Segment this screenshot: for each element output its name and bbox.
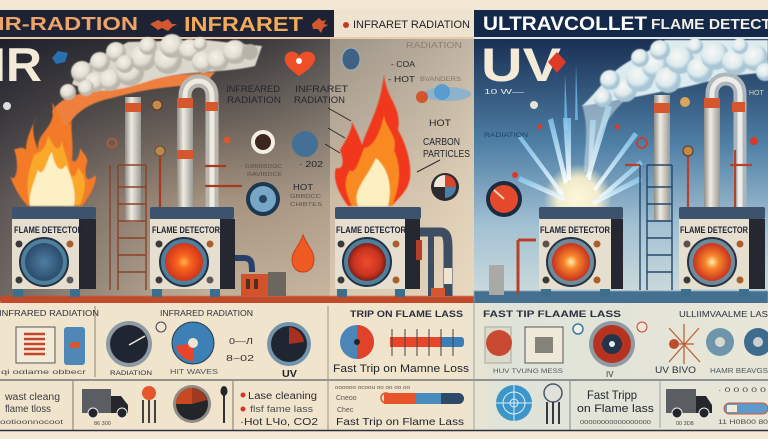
strip headings: INFRARED RADIATION	[0, 309, 99, 318]
header label: infrared radiation: INFRARET RADIATION	[353, 19, 470, 31]
strip headings: ULLIIMVAALME LAS	[679, 310, 768, 319]
bottom row: ultraviolet	[496, 384, 768, 427]
panel: lower information strip	[0, 303, 768, 431]
detector 2	[150, 207, 235, 297]
header label: infrared radiation	[334, 10, 474, 37]
bottom row: infrared: flsf fame lass	[250, 404, 314, 414]
bottom row: ultraviolet: Fast Tripp	[587, 388, 637, 402]
gauges and indicators: infrared row: qi oαlame obbecr	[1, 370, 86, 376]
detector 3	[335, 207, 421, 297]
indicators: ultraviolet row: HUV TVUNG MESS	[493, 368, 564, 375]
gauges and indicators: infrared row: HIT WAVES	[170, 369, 218, 376]
callouts: ultraviolet annotations: RADIATION	[484, 132, 528, 139]
bottom row: ultraviolet: 00 3D8	[676, 421, 694, 427]
callouts: infrared labels: CHIBTES	[290, 202, 322, 208]
panel: infrared scene	[0, 39, 474, 304]
callouts: infrared labels: RADIATION	[227, 95, 281, 105]
strip headings: FAST TIP FLAAME LASS	[483, 309, 621, 319]
header bar: ultraviolet: ULTRAVCOLLET	[483, 14, 647, 35]
indicators: ultraviolet row: IV	[606, 370, 614, 379]
detector 5	[679, 207, 765, 297]
gauges and indicators: infrared row	[1, 321, 311, 380]
gauges and indicators: infrared row: UV	[282, 369, 297, 380]
bottom row: infrared: wast cleang	[4, 392, 60, 403]
pipework and junction box	[235, 258, 286, 296]
bottom row: trip readout: oooooo ocoou oo oo oo oo	[335, 385, 410, 391]
callouts: infrared labels: - COA	[391, 60, 416, 69]
detector 3: FLAME DETECTOR	[336, 225, 406, 236]
bottom row: ultraviolet: on Flame lass	[577, 403, 655, 415]
trip indicator and bar	[333, 325, 470, 375]
callouts: infrared labels: BVANDERS	[420, 77, 461, 83]
callouts: infrared labels: RAVIBDCE	[247, 172, 282, 178]
bottom row: ultraviolet: 11 H0B00 80	[718, 420, 768, 426]
pipework: ultraviolet gas cylinder	[489, 240, 536, 295]
detector 5: FLAME DETECTOR	[680, 225, 748, 236]
callouts: infrared labels: INFRARET	[295, 84, 349, 94]
panel: ultraviolet scene	[474, 39, 768, 304]
heading: UV: UV	[481, 38, 562, 91]
detector 4	[539, 207, 623, 297]
header bar: ultraviolet	[474, 10, 768, 39]
smoke: ultraviolet	[582, 38, 768, 172]
callouts: infrared labels	[226, 41, 470, 208]
indicators: ultraviolet row: UV BIVO	[655, 365, 696, 375]
bottom row: trip readout: Chec	[337, 407, 354, 414]
smoke: infrared	[52, 34, 262, 132]
stacks and ladder: infrared	[108, 81, 242, 290]
bottom row: infrared	[0, 385, 318, 428]
strip headings	[0, 309, 768, 319]
header bar: ultraviolet: FLAME DETECT	[651, 16, 768, 33]
bottom row: infrared: flame tloss	[5, 404, 51, 415]
pipework: right of detector 3	[416, 228, 448, 296]
detector 1	[12, 207, 96, 297]
detector 2: FLAME DETECTOR	[152, 225, 220, 236]
callouts: infrared labels: GBBBBDGC	[245, 164, 282, 170]
strip headings: TRIP ON FLAME LASS	[350, 309, 463, 319]
strip headings: INFRARED RADIATION	[160, 309, 253, 318]
callouts: infrared labels: PARTICLES	[423, 149, 470, 160]
bottom row: ultraviolet: · 0 0 0 0 0	[718, 388, 767, 394]
indicators: ultraviolet row	[485, 321, 768, 379]
icon: flame drop	[292, 235, 314, 272]
bottom row: trip readout: Cneoo	[336, 395, 357, 402]
detector 1: FLAME DETECTOR	[14, 225, 83, 236]
bottom row: infrared: ·Hot LЧo, CO2	[240, 416, 318, 428]
bottom row: trip readout	[335, 385, 464, 428]
callouts: infrared labels: INFREARED	[226, 84, 281, 94]
callouts: infrared labels: · 202	[299, 160, 324, 169]
gauges and indicators: infrared row: RADIATION	[110, 370, 152, 377]
callouts: ultraviolet annotations: HOT	[749, 90, 764, 97]
gauges and indicators: infrared row: 8−02	[226, 354, 255, 363]
icons: infrared annotations	[3, 48, 471, 216]
bottom row: ultraviolet: 00000000000000000	[580, 420, 651, 426]
bottom row: infrared: Lase cleaning	[248, 391, 317, 402]
callouts: infrared labels: RADIATION	[294, 95, 345, 105]
UV burst	[518, 65, 643, 232]
callouts: infrared labels: RADIATION	[406, 41, 462, 50]
callouts: infrared labels: HOT	[293, 182, 313, 192]
detector 4: FLAME DETECTOR	[540, 225, 610, 236]
callouts: infrared labels: - HOT	[388, 74, 415, 84]
callouts: infrared labels: CARBON	[423, 137, 460, 148]
flame: centre burner	[335, 74, 410, 206]
callouts: ultraviolet annotations: 10 W—	[484, 89, 524, 96]
callouts: infrared labels: HOT	[429, 118, 452, 128]
bottom row: trip readout: Fast Trip on Flame Lass	[336, 416, 464, 428]
header bar: infrared: IR-RADTION	[0, 14, 138, 34]
stacks and ladder: ultraviolet	[625, 79, 752, 290]
flame: left burner	[10, 102, 96, 206]
gauges and indicators: infrared row: 0—Л	[229, 337, 253, 346]
header bar: infrared: INFRARET	[184, 14, 303, 36]
callouts: infrared labels: GBBDCC	[290, 194, 321, 200]
bottom row: infrared: ootioonnocoot	[0, 420, 64, 426]
bottom row: infrared: 86 300	[94, 421, 111, 427]
callouts: ultraviolet annotations	[484, 52, 764, 217]
header bar: infrared	[0, 10, 474, 39]
trip indicator and bar: Fast Trip on Mamne Loss	[333, 363, 470, 375]
indicators: ultraviolet row: HAMR BEAVGS	[710, 368, 768, 375]
